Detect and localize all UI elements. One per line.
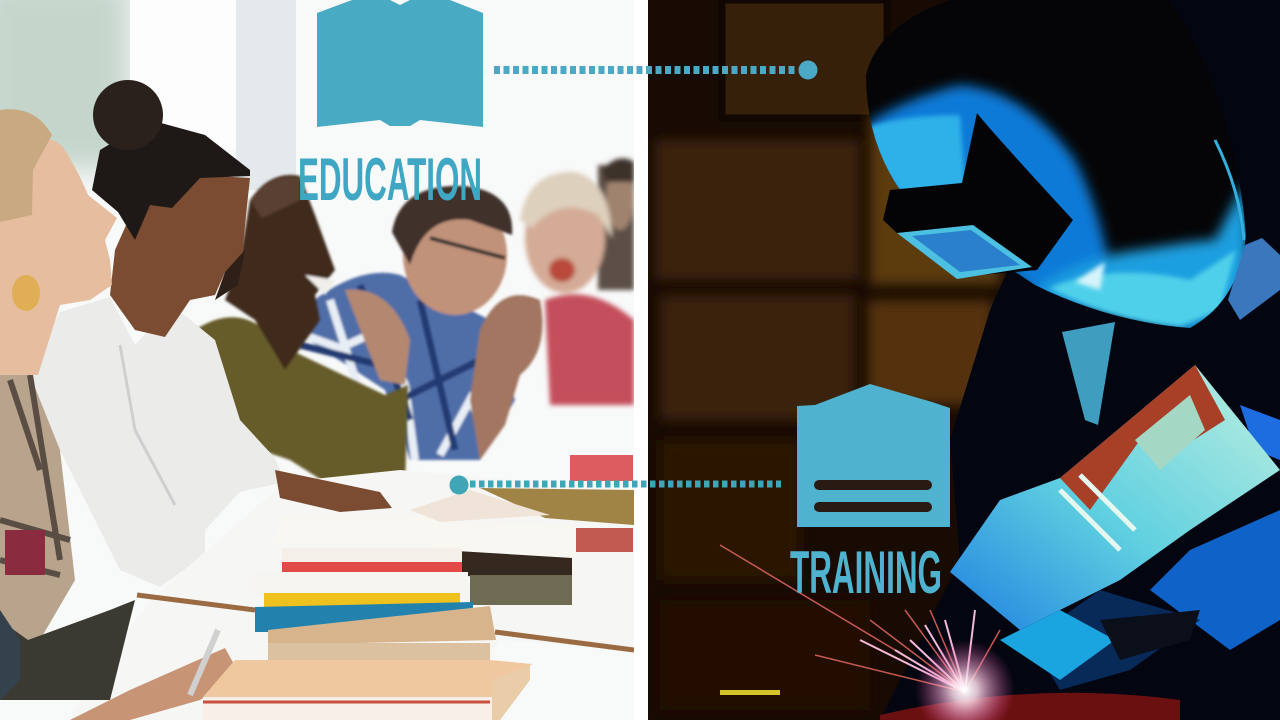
background student, far right bbox=[520, 158, 634, 405]
student in olive shirt bbox=[188, 175, 408, 495]
panel: welding photo bbox=[648, 0, 1280, 720]
woman in foreground bbox=[0, 109, 240, 720]
student in plaid shirt bbox=[285, 186, 542, 460]
book stack bbox=[203, 548, 572, 720]
welding glove bbox=[950, 365, 1280, 690]
connector: education dotted line bbox=[494, 60, 818, 80]
welding helmet bbox=[866, 0, 1250, 335]
heading: education: EDUCATION bbox=[298, 146, 482, 213]
jacket highlights bbox=[1062, 322, 1115, 425]
welder body bbox=[880, 0, 1280, 720]
connector: training dotted line bbox=[450, 476, 781, 494]
open book and notebooks right of table bbox=[410, 455, 634, 552]
student in white shirt bbox=[28, 80, 285, 587]
icon: training building bbox=[797, 384, 950, 527]
forearm on table bbox=[275, 470, 392, 512]
table bbox=[190, 470, 408, 566]
panel: education photo bbox=[0, 0, 634, 720]
heading: training: TRAINING bbox=[790, 539, 942, 606]
weld sparks bbox=[720, 545, 1180, 720]
icon: open book bbox=[317, 0, 483, 127]
